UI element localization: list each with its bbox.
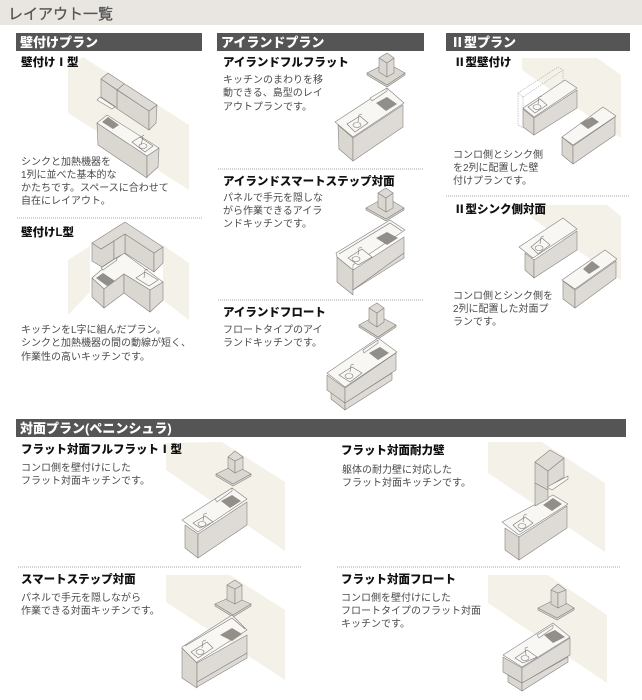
heading: Ⅱ型壁付け — [454, 54, 512, 70]
heading: wall plan: 壁付けプラン — [20, 35, 98, 50]
heading: フラット対面フルフラットⅠ型 — [21, 441, 182, 457]
description: パネルで手元を隠しながら — [21, 591, 141, 604]
description: シンクと加熱機器の間の動線が短く、 — [21, 336, 191, 349]
description: フロートタイプのアイ — [223, 324, 322, 336]
description: キッチンです。 — [341, 618, 410, 630]
heading: Ⅱ型シンク側対面 — [454, 201, 546, 217]
illustration: II type wall kitchen — [518, 58, 621, 164]
illustration: load-bearing wall kitchen — [488, 442, 605, 560]
heading: island plan — [217, 33, 424, 51]
description: コンロ側を壁付けにした — [341, 591, 451, 604]
heading: スマートステップ対面 — [21, 572, 136, 586]
description: 自在にレイアウト。 — [21, 194, 111, 207]
description: コンロ側とシンク側を — [453, 289, 553, 302]
heading: アイランドフルフラット — [223, 56, 349, 69]
description: フラット対面キッチンです。 — [21, 474, 150, 487]
heading: フラット対面耐力壁 — [341, 443, 445, 457]
description: パネルで手元を隠しな — [223, 191, 323, 204]
heading: アイランドスマートステップ対面 — [223, 174, 395, 188]
description: シンクと加熱機器を — [21, 155, 111, 168]
illustration: wall I type kitchen — [68, 57, 189, 190]
illustration: island float kitchen — [327, 303, 397, 410]
description: かたちです。スペースに合わせて — [21, 181, 169, 194]
illustration: island full flat kitchen — [335, 53, 405, 161]
illustration: flat float kitchen — [488, 575, 607, 691]
description: フラット対面キッチンです。 — [342, 476, 471, 489]
panel: wall L type — [21, 222, 191, 363]
title bar: レイアウト一覧 — [8, 6, 113, 23]
description: キッチンをL字に組んだプラン。 — [21, 323, 166, 336]
heading: フラット対面フロート — [341, 572, 456, 586]
heading: island plan: アイランドプラン — [221, 35, 324, 50]
heading: 壁付けⅠ型 — [21, 54, 78, 70]
panel: island smart step — [223, 174, 405, 295]
description: がら作業できるアイラ — [223, 204, 322, 217]
panel: II type sink facing — [453, 201, 621, 328]
panel: smart step facing — [21, 572, 285, 688]
description: ンドキッチンです。 — [223, 218, 312, 230]
heading: II type plan — [446, 32, 630, 51]
description: 躯体の耐力壁に対応した — [342, 463, 452, 476]
description: コンロ側とシンク側 — [453, 148, 543, 161]
panel: island float — [223, 303, 397, 410]
description: 動できる、島型のレイ — [223, 86, 323, 99]
description: ランです。 — [453, 316, 502, 328]
heading: II type plan: Ⅱ型プラン — [451, 32, 516, 51]
description: を2列に配置した壁 — [453, 162, 539, 174]
description: 作業性の高いキッチンです。 — [21, 350, 150, 363]
heading: アイランドフロート — [223, 306, 326, 319]
panel: wall I type — [21, 54, 189, 207]
illustration: L type kitchen — [68, 222, 189, 320]
heading: 壁付けL型 — [21, 225, 74, 239]
panel: II type wall — [453, 54, 621, 187]
description: ランドキッチンです。 — [223, 337, 322, 349]
description: 2列に配置した対面プ — [453, 302, 549, 315]
illustration: smart step kitchen — [166, 575, 285, 688]
panel: flat load-bearing wall — [341, 442, 605, 560]
description: フロートタイプのフラット対面 — [341, 604, 481, 617]
illustration: island smart step kitchen — [336, 188, 405, 295]
title bar — [0, 0, 642, 25]
description: アウトプランです。 — [223, 101, 312, 113]
description: 付けプランです。 — [453, 174, 532, 187]
panel: island full flat — [223, 53, 405, 161]
illustration: II type sink facing kitchen — [519, 205, 621, 308]
illustration: flat full flat kitchen — [166, 442, 285, 558]
panel: flat facing float — [341, 572, 607, 691]
panel: flat full flat I type — [21, 441, 285, 558]
heading: peninsula plan: 対面プラン(ペニンシュラ) — [20, 421, 172, 436]
heading: peninsula plan — [16, 419, 626, 437]
description: コンロ側を壁付けにした — [21, 461, 131, 474]
description: 作業できる対面キッチンです。 — [21, 604, 160, 617]
description: 1列に並べた基本的な — [21, 168, 117, 181]
description: キッチンのまわりを移 — [223, 73, 323, 86]
heading: wall plan — [16, 33, 202, 51]
